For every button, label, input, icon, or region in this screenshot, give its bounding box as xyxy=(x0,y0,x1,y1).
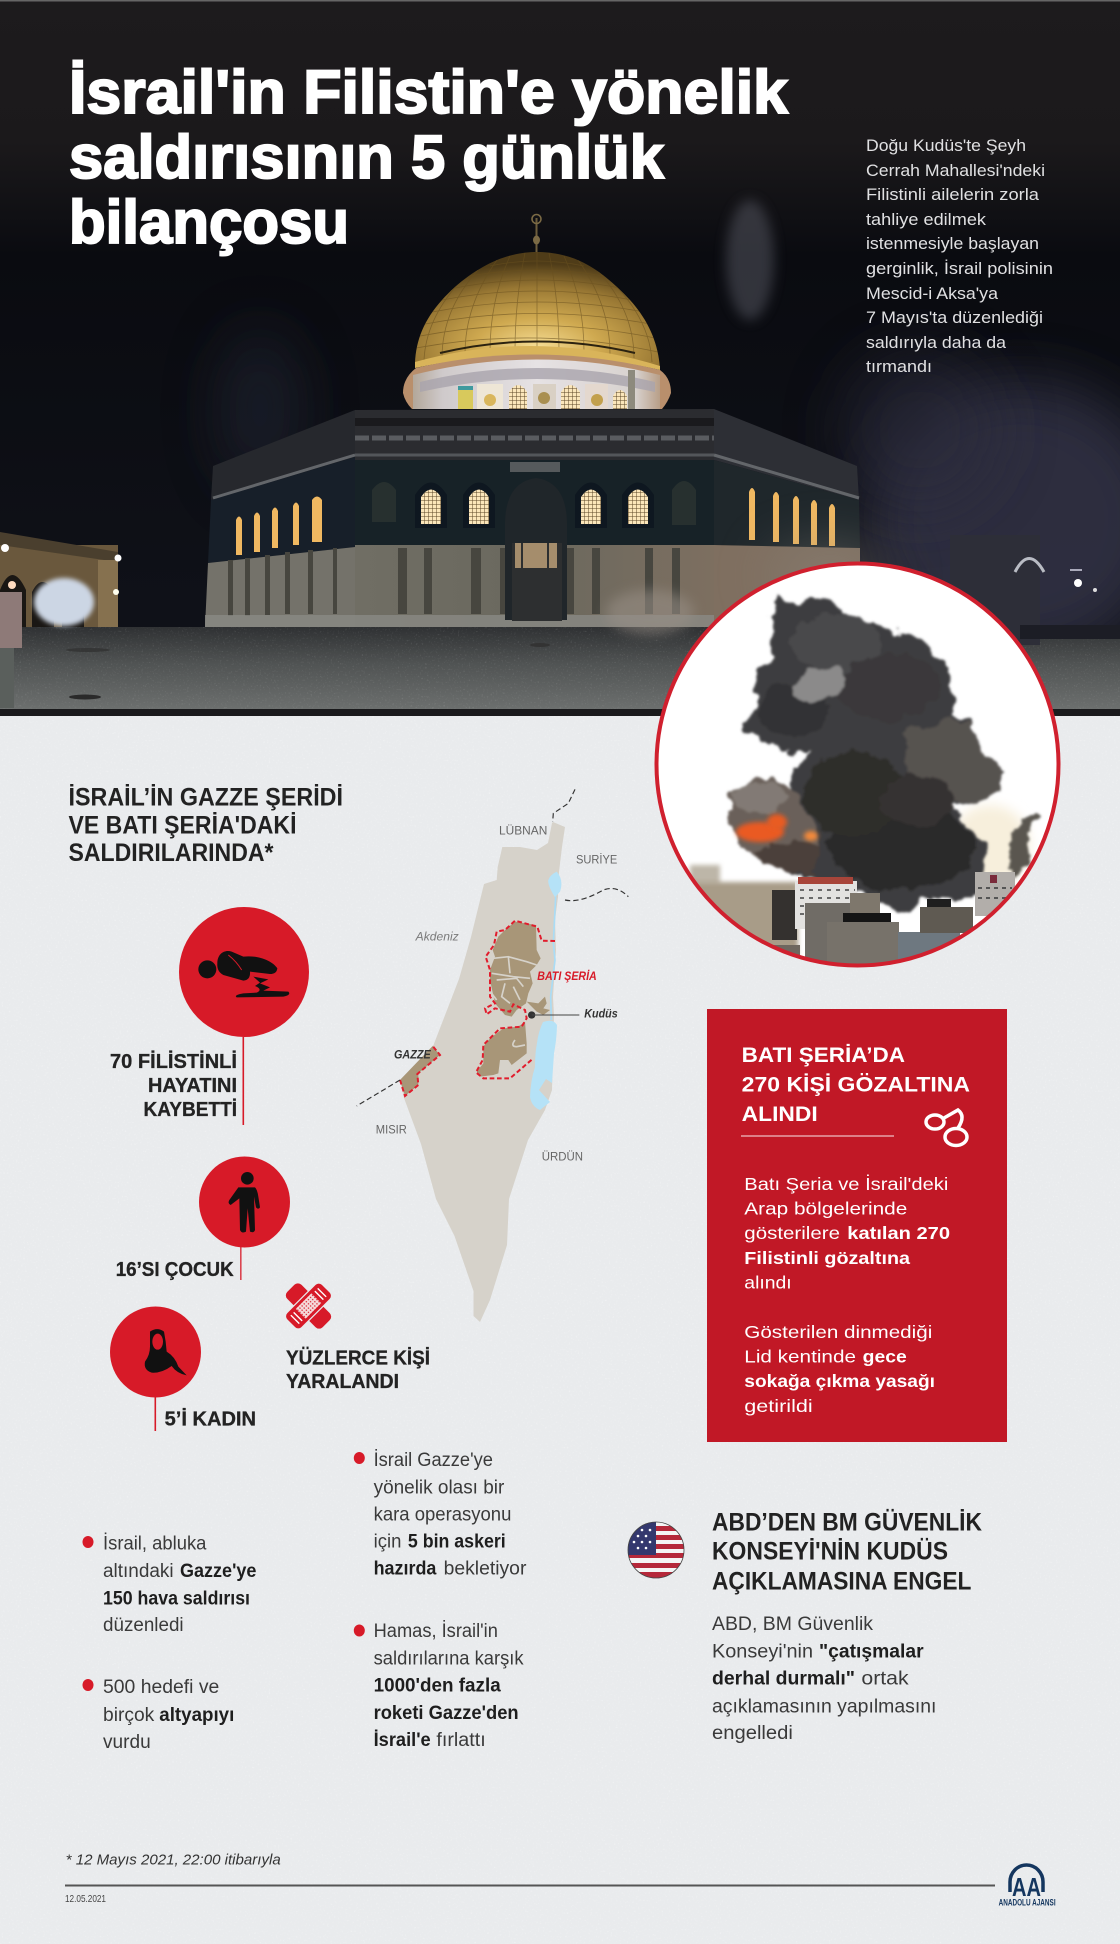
heading: attacks: SALDIRILARINDA* xyxy=(68,839,274,867)
panel: West Bank detentions: 270 KİŞİ GÖZALTINA xyxy=(742,1072,970,1096)
explosion photo in red circle xyxy=(656,564,1058,975)
octagonal building xyxy=(205,409,890,634)
bullets: column 1: İsrail, abluka xyxy=(103,1534,207,1554)
stat: hundreds injured: YÜZLERCE KİŞİ xyxy=(286,1346,430,1370)
side windows xyxy=(236,488,835,555)
panel: West Bank detentions: katılan 270 xyxy=(847,1223,950,1243)
map: BATI ŞERİA xyxy=(537,968,597,983)
bullets: column 2: saldırılarına karşık xyxy=(374,1648,524,1670)
stat: hundreds injured xyxy=(273,1271,430,1393)
panel: West Bank detentions: Batı Şeria ve İsrail'deki xyxy=(744,1174,948,1194)
intro text: tırmandı xyxy=(866,357,932,376)
block: US blocks UN statement: ABD’DEN BM GÜVENLİK xyxy=(712,1508,982,1536)
intro text: tahliye edilmek xyxy=(866,210,987,229)
block: US blocks UN statement: Konseyi'nin xyxy=(712,1642,813,1662)
door xyxy=(505,478,567,620)
Jerusalem marker xyxy=(528,1011,535,1019)
block: US blocks UN statement: ortak xyxy=(861,1668,909,1690)
intro text: gerginlik, İsrail polisinin xyxy=(866,259,1053,278)
panel: West Bank detentions: sokağa çıkma yasağı xyxy=(744,1371,935,1391)
heading: attacks: İSRAİL’İN GAZZE ŞERİDİ xyxy=(68,784,343,812)
warm haze xyxy=(950,805,1030,885)
icon: child xyxy=(229,1172,260,1233)
block: US blocks UN statement: ABD, BM Güvenlik xyxy=(712,1614,874,1635)
left arcade xyxy=(0,532,122,708)
icon: handcuffs xyxy=(926,1110,967,1146)
title: bilançosu xyxy=(69,188,349,256)
bullets: column 1: altındaki xyxy=(103,1561,174,1582)
bullets: column 2: Hamas, İsrail'in xyxy=(374,1621,498,1642)
block: US blocks UN statement: açıklamasının yapılmasını xyxy=(712,1696,936,1718)
stat: 70 killed xyxy=(110,907,309,1125)
panel: West Bank detentions: Lid kentinde xyxy=(744,1346,856,1366)
block: US blocks UN statement: derhal durmalı" xyxy=(712,1668,855,1690)
land xyxy=(400,822,565,1322)
panel: West Bank detentions: Filistinli gözaltına xyxy=(744,1248,910,1268)
map: GAZZE xyxy=(394,1048,432,1062)
bullets: column 1 xyxy=(82,1534,256,1753)
front window recesses xyxy=(415,482,654,528)
date: 12.05.2021 xyxy=(65,1893,106,1905)
wall gaps xyxy=(228,548,680,616)
panel: West Bank detentions: Gösterilen dinmediği xyxy=(744,1322,932,1342)
map: Akdeniz xyxy=(415,930,459,944)
bullets: column 1: altyapıyı xyxy=(159,1705,234,1726)
bullets: column 1: 150 hava saldırısı xyxy=(103,1588,250,1610)
gold dome xyxy=(415,252,660,370)
intro text: saldırıyla daha da xyxy=(866,333,1007,352)
footer rule xyxy=(65,1884,995,1886)
panel: West Bank detentions: gece xyxy=(863,1346,907,1366)
bullets: column 2: fırlattı xyxy=(436,1730,486,1751)
bullets: column 2: İsrail Gazze'ye xyxy=(374,1450,493,1471)
bullets: column 1: Gazze'ye xyxy=(180,1561,256,1582)
map: SURİYE xyxy=(576,852,617,866)
bullets: column 2 xyxy=(354,1450,527,1751)
icon: US flag xyxy=(628,1522,684,1578)
map: ÜRDÜN xyxy=(542,1150,583,1164)
map: Kudüs xyxy=(584,1006,618,1020)
right buildings xyxy=(950,535,1120,645)
water xyxy=(530,872,561,1110)
stat: 70 killed: KAYBETTİ xyxy=(144,1098,237,1121)
block: US blocks UN statement: KONSEYİ'NİN KUDÜS xyxy=(712,1536,948,1566)
block: US blocks UN statement: engelledi xyxy=(712,1723,793,1744)
bullets: column 1: düzenledi xyxy=(103,1615,184,1636)
intro text: Filistinli ailelerin zorla xyxy=(866,185,1040,204)
logo: Anadolu Ajansı: AA xyxy=(1012,1872,1041,1902)
intro text: Cerrah Mahallesi'ndeki xyxy=(866,161,1045,180)
block: US blocks UN statement xyxy=(712,1508,982,1744)
bottom edge of hero xyxy=(0,709,1120,716)
bullets: column 2: 5 bin askeri xyxy=(408,1532,506,1552)
bullets: column 2: yönelik olası bir xyxy=(374,1478,505,1498)
stat: 70 killed: 70 FİLİSTİNLİ xyxy=(110,1050,237,1073)
stat: 5 women: 5’İ KADIN xyxy=(165,1408,256,1430)
panel: West Bank detentions: getirildi xyxy=(744,1396,813,1416)
frieze bands xyxy=(355,436,714,440)
panel: West Bank detentions: ALINDI xyxy=(742,1102,818,1126)
intro text xyxy=(866,136,1053,376)
bullets: column 2: 1000'den fazla xyxy=(374,1676,501,1696)
finial xyxy=(532,214,541,252)
title: saldırısının 5 günlük xyxy=(69,123,664,191)
bullets: column 2: için xyxy=(374,1532,401,1552)
logo: Anadolu Ajansı: ANADOLU AJANSI xyxy=(999,1898,1056,1908)
bullets: column 1: vurdu xyxy=(103,1732,151,1753)
heading: attacks: VE BATI ŞERİA'DAKİ xyxy=(68,812,296,840)
logo: Anadolu Ajansı xyxy=(999,1865,1056,1908)
panel: West Bank detentions: BATI ŞERİA’DA xyxy=(742,1043,905,1067)
bullets: column 1: 500 hedefi ve xyxy=(103,1677,219,1698)
bullets: column 2: İsrail'e xyxy=(374,1730,431,1751)
stat: 5 women xyxy=(110,1306,256,1431)
title: İsrail'in Filistin'e yönelik xyxy=(69,58,788,126)
icon: woman with headscarf xyxy=(145,1329,187,1375)
icon: bandage xyxy=(273,1271,344,1341)
intro text: Doğu Kudüs'te Şeyh xyxy=(866,136,1026,155)
city buildings xyxy=(683,865,1015,975)
territories xyxy=(490,922,541,1017)
stat: 16 children xyxy=(116,1156,290,1281)
smoke cloud xyxy=(730,597,1043,913)
bullets: column 2: roketi Gazze'den xyxy=(374,1703,519,1724)
panel: West Bank detentions xyxy=(707,1009,1007,1442)
intro text: Mescid-i Aksa'ya xyxy=(866,284,999,303)
map xyxy=(357,789,628,1322)
heading: attacks xyxy=(68,784,343,867)
stat: hundreds injured: YARALANDI xyxy=(286,1371,399,1393)
intro text: 7 Mayıs'ta düzenlediği xyxy=(866,308,1043,327)
red dashed borders xyxy=(400,921,555,1096)
panel: West Bank detentions: alındı xyxy=(744,1272,792,1292)
footnote: * 12 Mayıs 2021, 22:00 itibarıyla xyxy=(66,1852,281,1868)
title xyxy=(69,58,788,256)
block: US blocks UN statement: "çatışmalar xyxy=(819,1642,924,1662)
bullets: column 2: kara operasyonu xyxy=(374,1504,511,1526)
icon: lying body xyxy=(198,951,289,997)
bullets: column 2: hazırda xyxy=(374,1558,437,1580)
bullets: column 2: bekletiyor xyxy=(444,1558,527,1580)
panel: West Bank detentions: gösterilere xyxy=(744,1223,840,1243)
map: MISIR xyxy=(376,1122,407,1136)
panel: West Bank detentions: Arap bölgelerinde xyxy=(744,1198,907,1218)
stat: 16 children: 16’SI ÇOCUK xyxy=(116,1259,234,1281)
block: US blocks UN statement: AÇIKLAMASINA ENGEL xyxy=(712,1568,971,1596)
drum xyxy=(403,354,671,409)
hero photo: mosque at night xyxy=(0,0,1120,709)
country borders xyxy=(357,789,628,1106)
bullets: column 1: birçok xyxy=(103,1705,155,1726)
intro text: istenmesiyle başlayan xyxy=(866,234,1039,253)
stat: 70 killed: HAYATINI xyxy=(148,1075,237,1097)
map: LÜBNAN xyxy=(499,824,547,838)
front windows xyxy=(421,490,648,524)
